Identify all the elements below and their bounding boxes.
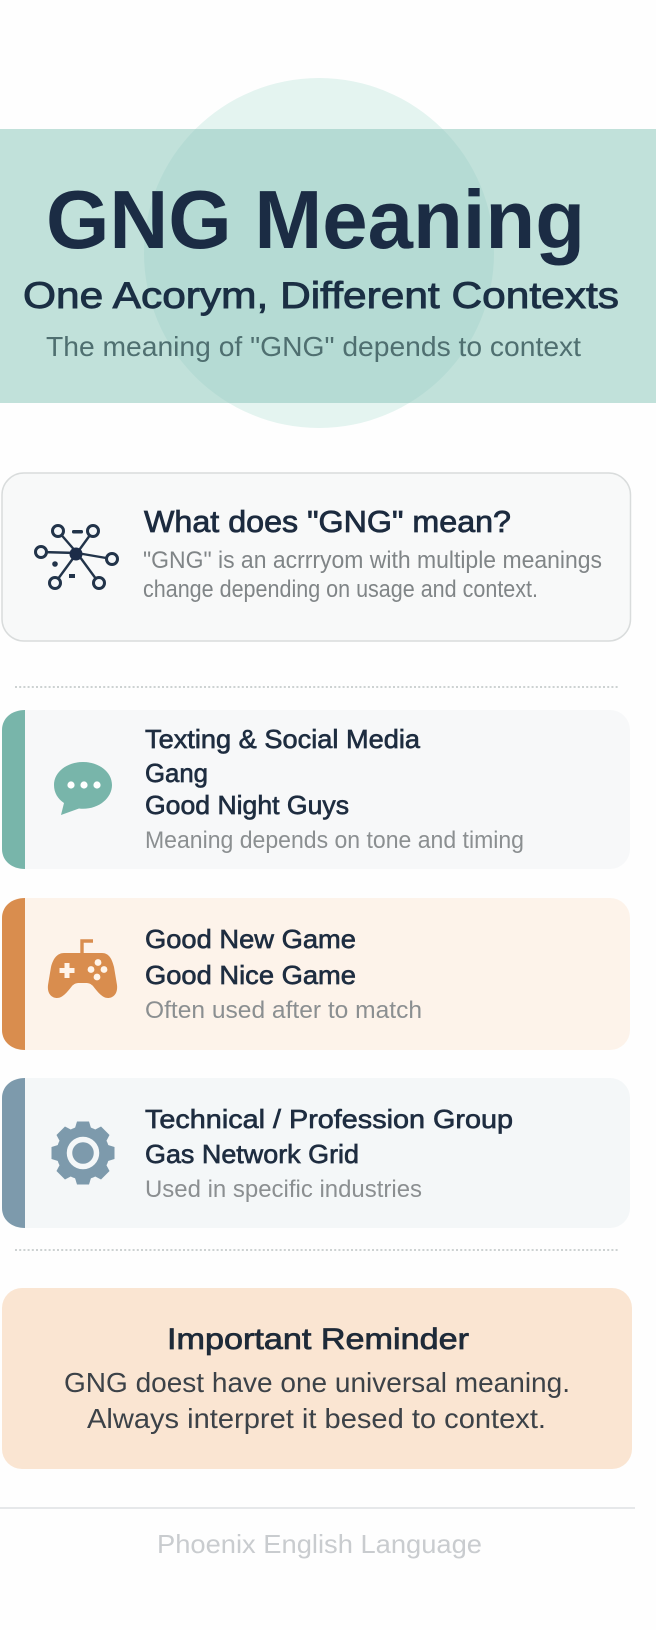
card description — [143, 547, 602, 603]
meanings list: Gang — [145, 758, 208, 788]
card heading: What does "GNG" mean? — [144, 504, 511, 539]
reminder text — [64, 1367, 570, 1434]
header panel — [0, 78, 656, 428]
meanings list — [145, 924, 356, 990]
callout: important reminder — [2, 1288, 632, 1469]
meanings list: Texting & Social Media — [145, 724, 421, 754]
icon: chat bubble — [54, 762, 112, 815]
panel: what does GNG mean — [2, 473, 630, 641]
note: Used in specific industries — [145, 1176, 422, 1203]
footer: Phoenix English Language — [157, 1529, 482, 1559]
tagline: The meaning of "GNG" depends to context — [46, 331, 581, 362]
reminder text: GNG doest have one universal meaning. — [64, 1367, 570, 1398]
panel: technical — [2, 1078, 630, 1228]
note: Often used after to match — [145, 997, 422, 1024]
icon: network — [36, 526, 118, 588]
note: Meaning depends on tone and timing — [145, 827, 524, 854]
panel: gaming — [2, 898, 630, 1050]
meanings list: Technical / Profession Group — [145, 1104, 513, 1134]
icon: gear — [52, 1122, 114, 1184]
title: GNG Meaning — [46, 173, 585, 266]
reminder text: Always interpret it besed to context. — [87, 1403, 546, 1434]
card description: change depending on usage and context. — [143, 576, 538, 603]
meanings list: Good Nice Game — [145, 960, 356, 990]
panel: texting and social media — [2, 710, 630, 869]
subtitle: One Acorym, Different Contexts — [23, 275, 619, 316]
meanings list: Good New Game — [145, 924, 356, 954]
meanings list — [145, 724, 421, 820]
icon: game controller — [48, 941, 117, 998]
card description: "GNG" is an acrrryom with multiple meanings — [143, 547, 602, 574]
meanings list: Gas Network Grid — [145, 1139, 359, 1169]
meanings list: Good Night Guys — [145, 790, 349, 820]
meanings list — [145, 1104, 513, 1169]
reminder heading: Important Reminder — [167, 1323, 469, 1356]
